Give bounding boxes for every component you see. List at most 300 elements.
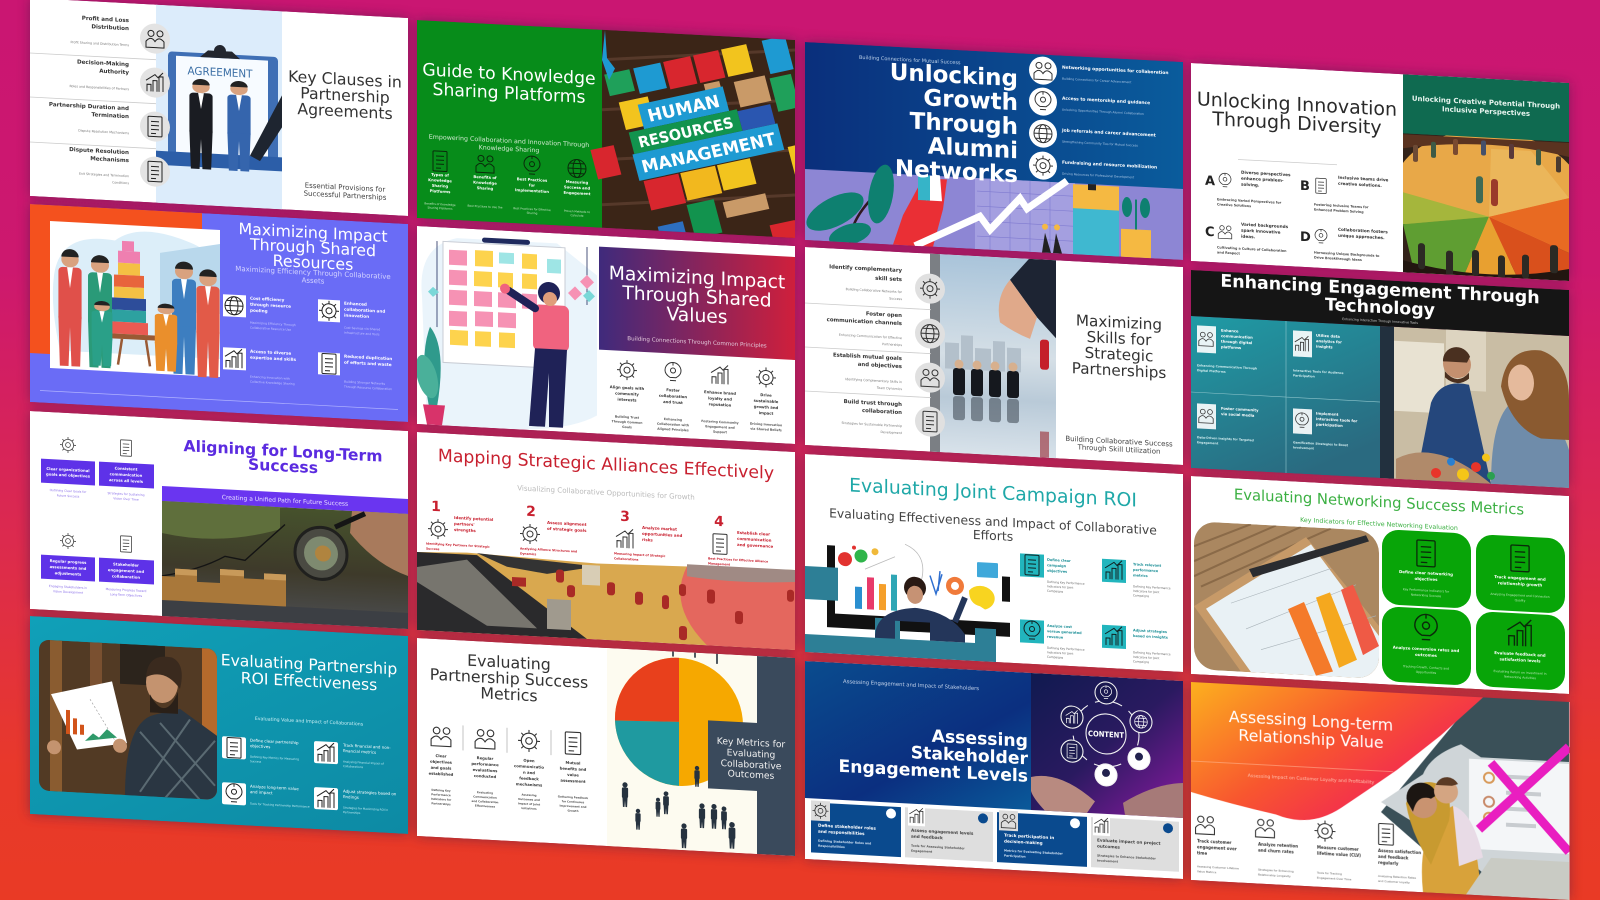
stage card 1: and responsibilities — [818, 829, 865, 836]
metric 2: performance — [471, 761, 499, 767]
metric 4: for Continuous — [562, 799, 585, 804]
title: Maximizing Impact — [238, 219, 388, 246]
clause 2: Decision-Making — [77, 59, 129, 68]
clause 4: Conditions — [112, 180, 129, 185]
clause 4: Dispute Resolution — [69, 147, 129, 156]
title: Evaluating — [467, 651, 551, 674]
benefit 3: Strengthening Community Ties for Mutual Success — [1062, 140, 1138, 148]
feature: measuring: Proven Methods to — [564, 209, 590, 214]
step 1: Success — [250, 759, 262, 764]
metric 1: Campaigns — [1047, 589, 1064, 594]
feature: measuring: Engagement — [564, 190, 591, 196]
feature: types: Sharing Platforms — [428, 206, 453, 211]
item 4: Gamification Strategies to Boost — [1293, 440, 1349, 447]
header band: Enhancing Engagement Through — [1220, 272, 1540, 308]
feature: best practices — [513, 155, 551, 216]
stage card 1: Responsibilities — [818, 844, 845, 849]
metric card 2: Analyzing Engagement and Connection — [1490, 592, 1550, 599]
title: Agreements — [297, 99, 393, 123]
benefit 1 — [1029, 56, 1168, 85]
title: Partnership — [300, 83, 390, 107]
feature: best practices: Best Practices — [517, 176, 548, 183]
photo: HR blocks — [590, 30, 795, 238]
goal 2: communication — [110, 471, 143, 478]
step 2 — [314, 741, 391, 771]
step 2: 2 — [526, 504, 536, 520]
photo: two people using touch screen — [1380, 326, 1569, 488]
title panel: Building Connections Through Common Principles — [627, 336, 767, 350]
metric card 3: Tracking Growth, Contacts and — [1402, 664, 1449, 671]
photo: clipboard and bar chart — [1194, 521, 1379, 679]
value 1 — [610, 359, 644, 430]
step 4: communication — [737, 536, 772, 543]
feature: best practices: for — [529, 182, 535, 188]
title: Skills for — [1087, 328, 1152, 349]
metric 3: communicatio — [514, 763, 544, 770]
subtitle: Key Indicators for Effective Networking Evaluation — [1300, 517, 1458, 532]
slide: Mapping Strategic Alliances Effectively — [417, 432, 795, 650]
header band: Unlocking Creative Potential Through — [1412, 95, 1560, 111]
title: Growth — [923, 85, 1018, 116]
photo: HR blocks: MANAGEMENT — [640, 129, 778, 178]
title: Unlocking Innovation — [1197, 88, 1397, 121]
item 2: insights — [1316, 345, 1333, 350]
point B: creative solutions. — [1338, 181, 1382, 188]
item 3: expertise and skills — [250, 355, 296, 362]
skill 4: Build trust through — [844, 399, 902, 408]
item 2: Cost Savings via Shared — [344, 326, 380, 332]
title: Stakeholder — [911, 743, 1029, 769]
stage card 2 — [905, 805, 993, 862]
stage card 4: outcomes — [1097, 843, 1120, 850]
skill 1: skill sets — [875, 276, 902, 283]
goal 3: Engaging Stakeholders in — [49, 584, 87, 590]
stage card 4 — [1091, 815, 1179, 872]
skill 4: Strategies for Sustainable Partnership — [842, 421, 902, 428]
metric card 1: Key Performance Indicators for — [1403, 587, 1450, 594]
subtitle: Empowering Collaboration and Innovation Through — [429, 134, 589, 149]
metric 1: engagement over — [1197, 844, 1237, 851]
slide: Key Clauses in Partnership Agreements — [30, 0, 408, 216]
item 3 — [223, 347, 296, 386]
photo: figures on reflective surface — [930, 254, 1056, 458]
subtitle: Assessing Engagement and Impact of Stakeholders — [843, 679, 979, 692]
stage card 4: Strategies to Enhance Stakeholder — [1097, 853, 1156, 861]
metric 4: and Customer Loyalty — [1378, 879, 1410, 885]
skill 4: Development — [881, 430, 903, 435]
stage card 4: Evaluate impact on project — [1097, 837, 1161, 846]
stage card 3: decision-making — [1004, 839, 1043, 846]
goal 1 — [41, 436, 95, 499]
step 1: Defining Key Metrics for Measuring — [250, 755, 299, 761]
value 2: collaboration — [659, 393, 687, 399]
goal 4: Long-Term Objectives — [110, 592, 142, 598]
metric card 3: Opportunities — [1416, 670, 1437, 675]
metric 3: Analyze cost — [1047, 624, 1072, 629]
subtitle: Building Connections for Mutual Success — [859, 55, 961, 66]
subtitle: Assets — [302, 276, 325, 286]
metric 2: conducted — [474, 773, 496, 779]
metric card 1 — [1382, 529, 1471, 609]
skill 2: communication channels — [827, 317, 902, 327]
point A: Creative Solutions — [1217, 202, 1251, 208]
step 2: Dynamics — [520, 551, 537, 556]
title: Success — [248, 456, 318, 477]
step 3: opportunities and — [642, 531, 682, 538]
metric 1: Track customer — [1197, 838, 1232, 845]
title: Relationship Value — [1238, 726, 1384, 752]
benefit 1: Networking opportunities for collaboration — [1062, 65, 1168, 76]
goal 1: Outlining Clear Goals for — [50, 488, 87, 494]
metric 2: and Collaboration — [472, 799, 499, 804]
step 1: 1 — [431, 499, 441, 515]
title panel: Values — [666, 304, 728, 328]
goal 2: Vision Over Time — [113, 496, 139, 502]
callout: key metrics: Outcomes — [728, 768, 775, 782]
item 3: Foster community — [1221, 407, 1259, 413]
item 4: interactive tools for — [1316, 417, 1358, 423]
band: Creating a Unified Path for Future Success — [222, 494, 348, 508]
skill 1 — [829, 264, 945, 304]
metric card 4: Evaluate feedback and — [1494, 650, 1546, 658]
item 4 — [318, 352, 392, 391]
metric 1: time — [1197, 850, 1207, 856]
item 1 — [1197, 325, 1257, 375]
item 3 — [1197, 403, 1259, 448]
item 1: Maximizing Efficiency Through — [250, 321, 296, 327]
metric 1 — [429, 727, 454, 806]
metric 1: Clear — [435, 753, 447, 759]
step 2: Track financial and non- — [342, 743, 391, 750]
metric 3: Indicators for Joint — [1047, 650, 1074, 656]
value 3: Fostering Community — [701, 419, 739, 425]
item 1 — [223, 294, 296, 332]
value 4 — [750, 367, 782, 432]
right bar — [757, 656, 795, 856]
slide: Evaluating Partnership Success Metrics — [417, 633, 795, 856]
slide: Assessing Stakeholder Engagement Levels — [805, 661, 1183, 879]
feature: benefits: Knowledge — [473, 179, 497, 186]
step 1: partners' — [454, 521, 475, 527]
title: Assessing Long-term — [1229, 707, 1393, 735]
title: Networks — [895, 156, 1018, 188]
benefit 4: Fundraising and resource mobilization — [1062, 160, 1157, 171]
stage card 2: Tools for Assessing Stakeholder — [911, 844, 965, 850]
image: content cycle on open hands: CONTENT — [1088, 729, 1125, 740]
subtitle: Successful Partnerships — [304, 189, 387, 202]
metric 1: Define clear — [1047, 558, 1071, 563]
clause 4: Exit Strategies and Termination — [79, 172, 129, 178]
silhouettes of people — [622, 762, 735, 851]
metric card 4: satisfaction levels — [1500, 656, 1541, 664]
point D: Harnessing Unique Backgrounds to — [1314, 251, 1380, 258]
gradient shape — [1191, 682, 1483, 830]
metric 3: Impact of Joint — [518, 801, 541, 807]
subtitle: Building Collaborative Success — [1065, 435, 1173, 448]
photo: strategy map — [417, 550, 795, 650]
metric 4: Assess satisfaction — [1378, 848, 1421, 855]
point C — [1206, 222, 1288, 255]
value 3: loyalty and — [708, 395, 732, 402]
benefit 3 — [1029, 120, 1156, 148]
step 4: Partnerships — [343, 810, 361, 815]
item 4: Implement — [1316, 412, 1339, 417]
clause 3 — [49, 102, 170, 142]
benefit 1: Building Connections for Career Advancement — [1062, 77, 1132, 84]
title: Guide to Knowledge — [422, 60, 596, 89]
stage card 2: Assess engagement levels — [911, 828, 974, 836]
step 1: objectives — [250, 743, 270, 749]
metric 4: Adjust strategies — [1133, 628, 1167, 634]
goal 4: engagement and — [108, 567, 144, 574]
metric 3: Measure customer — [1317, 845, 1359, 852]
item 1: Enhancing Communication Through — [1197, 363, 1257, 370]
value 1: Align goals with — [610, 384, 644, 391]
stage card 1: Define stakeholder roles — [818, 823, 876, 831]
value 1: interests — [617, 397, 637, 403]
slide: Aligning for Long-Term Success — [30, 411, 408, 629]
image: content cycle on open hands — [1031, 673, 1183, 818]
value 1: Goals — [622, 425, 632, 429]
metric 3: Open — [523, 758, 535, 763]
point C: spark innovative — [1241, 228, 1281, 235]
skill 4 — [842, 399, 945, 437]
slide: Unlocking Innovation Through Diversity — [1191, 63, 1585, 289]
metric 1: Defining Key — [431, 788, 451, 793]
point A: A — [1205, 174, 1215, 189]
item 4 — [1293, 408, 1358, 453]
metric 2 — [1256, 819, 1298, 879]
step 1 — [426, 498, 494, 554]
item 3: Data-Driven Insights for Targeted — [1197, 435, 1254, 442]
metric 4: assessment — [560, 778, 586, 784]
metric 2: Communication — [473, 794, 497, 800]
item 1: pooling — [250, 308, 268, 314]
metric 1: objectives — [1047, 569, 1067, 574]
callout: key metrics: Evaluating — [727, 747, 775, 761]
stage card 4: Involvement — [1097, 858, 1119, 864]
metric 1 — [1020, 553, 1085, 595]
skill list — [805, 263, 945, 437]
item 3: via social media — [1221, 412, 1255, 418]
title: Alumni — [928, 134, 1018, 164]
metric 4: Analyzing Retention Rates — [1378, 874, 1416, 880]
title: ROI Effectiveness — [241, 669, 377, 694]
item 2: Enhanced — [344, 301, 367, 307]
stage card 3 — [997, 810, 1087, 867]
stage card 2: Engagement — [911, 849, 933, 854]
goal 2 — [99, 439, 154, 503]
illustration: strategist at chart wall — [805, 539, 1010, 663]
title panel — [599, 247, 795, 360]
header band: Technology — [1325, 295, 1436, 321]
slide: Maximizing Skills for Strategic Partnerships — [805, 247, 1183, 465]
item 1: platforms — [1221, 345, 1242, 350]
subtitle: Visualizing Collaborative Opportunities for Growth — [517, 483, 695, 502]
point D: D — [1300, 230, 1311, 245]
metric card 1: Define clear networking — [1399, 569, 1453, 577]
step 1: Identifying Key Partners for Strategic — [426, 541, 490, 549]
step 1: strengths — [454, 527, 476, 533]
benefit 2: Access to mentorship and guidance — [1062, 96, 1150, 106]
point A: solving. — [1241, 182, 1260, 188]
feature: benefits: Sharing — [477, 185, 494, 191]
metric 3: Tools for Tracking — [1316, 871, 1342, 876]
metric 1: objectives — [430, 759, 453, 765]
header band: Inclusive Perspectives — [1442, 105, 1530, 118]
metric 4: value — [567, 772, 579, 778]
step 3: risks — [642, 537, 653, 543]
step 4 — [708, 513, 773, 569]
metric 1: Defining Key Performance — [1047, 580, 1085, 586]
metric 3: versus generated — [1047, 629, 1082, 635]
metric card 3: outcomes — [1415, 652, 1438, 658]
step 3 — [614, 508, 682, 564]
step 1: Success — [426, 546, 440, 551]
title: Engagement Levels — [839, 757, 1028, 787]
band — [162, 486, 408, 514]
value 1: Through Common — [612, 419, 642, 425]
step 4: and governance — [737, 542, 773, 549]
item 2: Infrastructure and Tools — [344, 331, 380, 337]
point C: C — [1205, 225, 1215, 240]
feature: best practices: Sharing — [527, 211, 538, 215]
point A: Diverse perspectives — [1241, 170, 1291, 177]
slide: Unlocking Growth Through Alumni Networks — [800, 42, 1183, 269]
clause 4: Mechanisms — [90, 156, 130, 164]
feature: measuring: Measuring — [566, 179, 589, 185]
benefit 2: Unlocking Opportunities Through Alumni Collaboration — [1062, 108, 1144, 116]
goal 1: Clear organizational — [46, 466, 90, 473]
benefit 3: Job referrals and career advancement — [1061, 128, 1156, 139]
goal 2: Strategies for Sustaining — [107, 491, 145, 497]
step 4: 4 — [714, 514, 724, 530]
value 3: reputation — [709, 401, 732, 408]
step 1 — [222, 736, 299, 766]
point D: unique approaches. — [1338, 233, 1385, 240]
title: Metrics — [480, 683, 538, 705]
item 2: analytics for — [1316, 339, 1342, 344]
goal 4: Measuring Progress Toward — [106, 587, 147, 593]
metric card 1: Networking Success — [1411, 593, 1442, 598]
callout: key metrics: Collaborative — [721, 758, 782, 772]
value 1: community — [615, 390, 639, 397]
subtitle: Essential Provisions for — [305, 182, 385, 194]
title: Partnerships — [1072, 359, 1166, 382]
illustration: team stacking blocks — [50, 221, 220, 378]
skill 4: collaboration — [862, 408, 902, 416]
metric 2: Track relevant — [1133, 562, 1162, 568]
value 3: Enhance brand — [704, 389, 736, 396]
step 4: Strategies for Maximizing ROI in — [343, 806, 388, 812]
value 2 — [657, 362, 689, 432]
feature: best practices: Best Practices for Effective — [513, 206, 551, 212]
subtitle: Knowledge Sharing — [479, 144, 539, 154]
value 3 — [701, 364, 739, 435]
metric card 3: Analyze conversion rates and — [1393, 645, 1459, 653]
title: Unlocking — [890, 59, 1018, 92]
metric card 2: relationship growth — [1498, 580, 1542, 588]
goal 3: Vision Development — [53, 589, 84, 595]
item 2: Interactive Tools for Audience — [1293, 368, 1344, 375]
value 4: via Shared Beliefs — [750, 427, 782, 432]
point B: Inclusive teams drive — [1338, 175, 1389, 182]
clause 4 — [69, 147, 170, 187]
step 2 — [520, 503, 587, 559]
item 3: Access to diverse — [250, 349, 291, 356]
subtitle: Efforts — [973, 527, 1013, 544]
benefit 4: Driving Resources for Professional Development — [1062, 172, 1135, 179]
feature: types: Types of — [431, 172, 449, 178]
metric 4: Gathering Feedback — [558, 794, 588, 800]
subtitle: Evaluating Value and Impact of Collaborations — [255, 716, 364, 728]
stage card 3: Track participation in — [1004, 833, 1054, 840]
slide: Evaluating Networking Success Metrics — [1191, 476, 1569, 694]
subtitle: Assessing Impact on Customer Loyalty and Profitability — [1248, 773, 1375, 786]
metric card 2: Quality — [1515, 598, 1526, 603]
step 3: Collaborations — [614, 556, 639, 562]
callout: key metrics: Key Metrics for — [717, 736, 785, 750]
step 2: financial metrics — [343, 748, 376, 755]
goal 3: assessments and — [50, 564, 87, 571]
point C: and Respect — [1217, 250, 1240, 256]
skill 1: Building Collaborative Networks for — [846, 287, 903, 294]
clause 3: Dispute Resolution Mechanisms — [78, 129, 129, 135]
metric 1: Performance — [431, 792, 451, 797]
clause 2: Authority — [99, 69, 129, 76]
item 1: Digital Platforms — [1197, 368, 1226, 374]
skill 3 — [833, 352, 945, 393]
step 4 — [314, 787, 397, 817]
point B: B — [1300, 179, 1310, 194]
item 1: through resource — [250, 302, 291, 309]
metric 4: benefits and — [560, 766, 587, 772]
title panel: Maximizing Impact — [609, 263, 785, 293]
title: Evaluating Networking Success Metrics — [1234, 486, 1524, 519]
metric 2 — [471, 729, 499, 809]
metric 3: Engagement Over Time — [1317, 876, 1351, 881]
metric 3 — [514, 729, 544, 811]
metric 4: Campaigns — [1133, 659, 1150, 664]
skill 1: Success — [889, 296, 902, 301]
step 3: Tools for Tracking Partnership Performance — [249, 802, 310, 809]
slide: Evaluating Partnership ROI Effectiveness — [30, 616, 408, 834]
step 1: Define clear partnership — [250, 738, 299, 745]
metric 2: metrics — [1133, 573, 1148, 578]
skill 2: Enhancing Communication for Effective — [839, 333, 902, 340]
metric 4 — [1378, 823, 1421, 885]
point C: Varied backgrounds — [1241, 222, 1289, 229]
step 3 — [222, 782, 310, 809]
metric 4: Defining Key Performance — [1133, 650, 1171, 656]
feature: types: Sharing — [432, 183, 449, 189]
slide: Maximizing Impact Through Shared Resources — [30, 204, 408, 422]
step 4: findings — [343, 794, 359, 800]
skill 3: Team Dynamics — [876, 386, 902, 391]
step 2: Assess alignment — [547, 520, 587, 527]
item 4: Involvement — [1293, 445, 1315, 451]
benefit 4 — [1029, 152, 1157, 180]
point A: enhance problem- — [1241, 176, 1284, 183]
point D: Collaboration fosters — [1338, 227, 1388, 234]
step 3: 3 — [620, 509, 630, 525]
clause 1: Profit and Loss — [82, 16, 130, 24]
value 4: Driving Innovation — [750, 422, 782, 427]
metric 1: Assessing Customer Lifetime — [1197, 864, 1239, 871]
step 2: Analyzing Financial Impact of — [343, 760, 385, 766]
header band — [1191, 270, 1569, 336]
goal 4: Stakeholder — [113, 561, 139, 568]
